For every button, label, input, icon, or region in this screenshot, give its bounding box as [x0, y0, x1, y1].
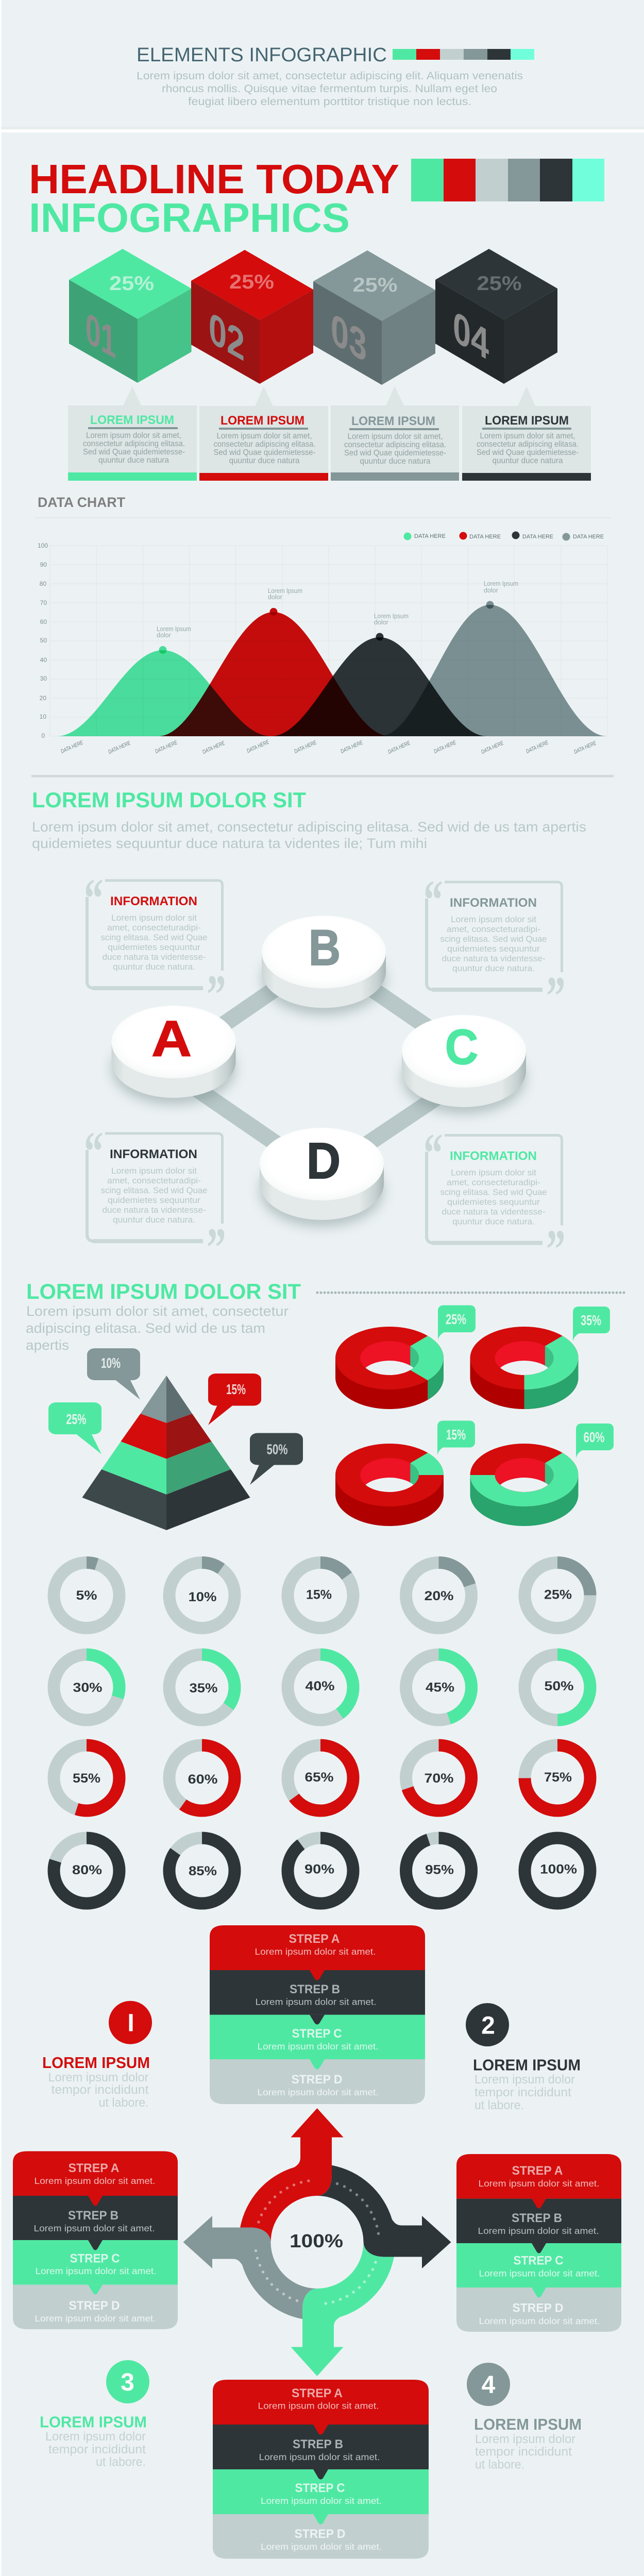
item 1	[42, 2001, 152, 2110]
section paragraph 2: apertis	[26, 1337, 69, 1353]
info card 2: Sed wid Quae quidemietesse-	[213, 448, 315, 457]
step panel: top: Lorem ipsum dolor sit amet.	[256, 1997, 376, 2007]
callout: donut 35%	[573, 1307, 610, 1342]
ring 75%	[524, 1745, 590, 1810]
item 2: Lorem ipsum dolor	[474, 2073, 575, 2087]
callout: donut 60%	[576, 1423, 614, 1459]
center label 100%: 100%	[290, 2230, 343, 2251]
step panel: bottom: STREP C	[295, 2481, 345, 2495]
ring 85%: 85%	[189, 1864, 217, 1878]
3d donut 60%	[470, 1444, 578, 1526]
arrow: down green	[291, 2242, 394, 2376]
step panel: bottom: Lorem ipsum dolor sit amet.	[259, 2452, 380, 2462]
info card 2: LOREM IPSUM	[221, 414, 304, 428]
info card 1: consectetur adipiscing elitasa.	[83, 439, 185, 448]
quote box: bottom left: “	[84, 1121, 103, 1182]
step panel: right: Lorem ipsum dolor sit amet.	[478, 2226, 599, 2236]
item 4: tempor incididunt	[475, 2445, 572, 2459]
area chart: DATA HERE	[573, 740, 598, 755]
step panel: bottom	[213, 2380, 429, 2558]
disc B: B	[309, 919, 341, 976]
callout: 25%	[48, 1402, 101, 1454]
info card 1: quuntur duce natura	[98, 456, 169, 465]
quote box: top left: amet, consecteturadipi-	[107, 923, 201, 933]
area chart: DATA HERE	[340, 739, 364, 755]
area chart: 100	[38, 542, 48, 549]
quote box: top left	[84, 868, 226, 1026]
section paragraph: quidemietes sequuntur duce natura ta videntes ile; Tum mihi	[32, 836, 427, 851]
step panel: left: STREP A	[68, 2161, 120, 2175]
info card 4: consectetur adipiscing elitasa.	[477, 440, 579, 449]
disc A: A	[151, 1010, 192, 1067]
item 3: tempor incididunt	[48, 2443, 146, 2456]
item 1: tempor incididunt	[52, 2083, 149, 2097]
step panel: bottom: STREP B	[293, 2437, 343, 2451]
quote box: top right: duce natura ta videntesse-	[442, 954, 545, 963]
data chart heading: DATA CHART	[38, 495, 125, 510]
step panel: right	[456, 2154, 621, 2332]
item 2: 2	[481, 2012, 495, 2039]
area chart: 80	[40, 580, 46, 587]
info card 4: Sed wid Quae quidemietesse-	[477, 448, 579, 457]
ring 35%	[169, 1655, 235, 1720]
cube 03: 25%	[352, 274, 398, 296]
step panel: left: Lorem ipsum dolor sit amet.	[35, 2266, 157, 2276]
quote box: bottom right	[423, 1123, 565, 1281]
info card 2	[199, 386, 328, 481]
item 1: Lorem ipsum dolor	[48, 2071, 149, 2084]
cube 02	[191, 250, 313, 384]
ring 50%	[524, 1655, 590, 1720]
ring 30%: 30%	[73, 1681, 102, 1695]
quote box: top left: quuntur duce natura.	[113, 962, 195, 972]
header intro text: feugiat libero elementum porttitor tristique non lectus.	[188, 96, 471, 108]
item 4: 4	[482, 2371, 496, 2399]
header title with palette: ELEMENTS INFOGRAPHIC	[137, 44, 387, 66]
callout: 50%	[250, 1433, 303, 1485]
info card 1	[68, 386, 197, 481]
step panel: left: Lorem ipsum dolor sit amet.	[35, 2313, 156, 2324]
area chart: DATA HERE	[433, 739, 457, 755]
area chart: DATA HERE	[525, 739, 550, 755]
arrow: right dark	[316, 2165, 451, 2268]
chart legend	[404, 532, 604, 541]
ring 80%: 80%	[72, 1863, 102, 1877]
header title with palette	[137, 44, 534, 66]
quote box: top right	[423, 870, 565, 1027]
area chart: DATA HERE	[107, 740, 132, 755]
ring 5%: 5%	[76, 1588, 97, 1603]
quote box: bottom left: amet, consecteturadipi-	[107, 1176, 201, 1185]
item 3: LOREM IPSUM	[40, 2413, 147, 2431]
quote box: bottom left: INFORMATION	[110, 1147, 197, 1161]
section paragraph 2: Lorem ipsum dolor sit amet, consectetur	[26, 1303, 289, 1319]
quote box: bottom right: ”	[546, 1219, 565, 1281]
area chart: DATA HERE	[387, 740, 412, 755]
header intro text	[137, 70, 523, 108]
section paragraph 2: adipiscing elitasa. Sed wid de us tam	[26, 1320, 265, 1336]
item 2	[466, 2003, 581, 2112]
ring 15%: 15%	[306, 1588, 332, 1602]
headline: HEADLINE TODAY	[29, 156, 399, 202]
quote box: top right: INFORMATION	[450, 896, 537, 910]
step panel: bottom: Lorem ipsum dolor sit amet.	[261, 2496, 382, 2506]
ring 75%: 75%	[544, 1770, 572, 1785]
area chart: 20	[40, 694, 46, 702]
section paragraph: Lorem ipsum dolor sit amet, consectetur adipiscing elitasa. Sed wid de us tam apertis	[32, 819, 586, 835]
step panel: left: STREP C	[70, 2251, 120, 2266]
step panel: bottom: STREP D	[295, 2527, 345, 2541]
info card 1: Lorem ipsum dolor sit amet,	[86, 431, 181, 440]
quote box: bottom left	[84, 1121, 226, 1279]
ring 20%	[406, 1563, 471, 1628]
area chart: 40	[40, 656, 47, 664]
area chart: DATA HERE	[246, 739, 270, 754]
area chart: Lorem Ipsum	[268, 587, 302, 595]
area chart: 10	[40, 713, 46, 720]
cube 02: 02	[209, 302, 245, 371]
ring 80%	[54, 1838, 120, 1903]
ring 40%	[287, 1655, 353, 1720]
quote box: top right: ”	[546, 966, 565, 1027]
ring 45%: 45%	[426, 1681, 454, 1695]
quote box: top left: “	[84, 868, 103, 929]
cube 01: 25%	[109, 273, 154, 295]
callout: donut 15%	[437, 1421, 475, 1455]
step panel: right: Lorem ipsum dolor sit amet.	[479, 2268, 600, 2278]
header intro text: rhoncus mollis. Quisque vitae fermentum turpis. Nullam eget leo	[162, 83, 497, 95]
connector lines between discs	[174, 956, 464, 1175]
ring 55%	[54, 1745, 120, 1810]
area chart: DATA HERE	[154, 739, 179, 755]
area chart: 70	[40, 599, 47, 606]
step panel: right: Lorem ipsum dolor sit amet.	[478, 2178, 600, 2189]
ring 95%: 95%	[425, 1863, 454, 1877]
info card 4	[462, 386, 591, 481]
info card 3	[331, 386, 459, 481]
callout: 10%: 10%	[101, 1355, 121, 1371]
step panel: left: Lorem ipsum dolor sit amet.	[34, 2176, 156, 2186]
header intro text: Lorem ipsum dolor sit amet, consectetur adipiscing elit. Aliquam venenatis	[137, 70, 523, 82]
quote box: bottom left: Lorem ipsum dolor sit	[111, 1166, 197, 1176]
callout: donut 60%: 60%	[583, 1429, 605, 1445]
ring 70%: 70%	[425, 1771, 453, 1786]
quote box: top left: INFORMATION	[110, 894, 197, 908]
step panel: top: Lorem ipsum dolor sit amet.	[258, 2041, 378, 2052]
palette swatches	[411, 159, 604, 201]
info card 2: consectetur adipiscing elitasa.	[213, 440, 315, 449]
cube 04: 25%	[477, 273, 521, 295]
step panel: top: Lorem ipsum dolor sit amet.	[258, 2087, 378, 2097]
step panel: right: Lorem ipsum dolor sit amet.	[479, 2316, 600, 2326]
ring 65%	[287, 1745, 353, 1810]
ring 5%	[54, 1563, 120, 1628]
quote box: bottom left: quuntur duce natura.	[113, 1215, 195, 1225]
ring 100%: 100%	[540, 1862, 577, 1876]
item 3: ut labore.	[96, 2455, 146, 2469]
section heading 2: LOREM IPSUM DOLOR SIT	[26, 1279, 301, 1303]
quote box: bottom left: duce natura ta videntesse-	[102, 1205, 206, 1215]
quote box: top left: quidemietes sequuntur	[108, 942, 200, 952]
quote box: top right: quuntur duce natura.	[452, 963, 535, 973]
step panel: top: STREP A	[289, 1932, 340, 1946]
step panel: bottom: STREP A	[292, 2386, 343, 2400]
disc C	[402, 1015, 526, 1114]
info card 4: LOREM IPSUM	[485, 414, 569, 428]
callout: donut 25%	[438, 1306, 476, 1340]
info card 4: Lorem ipsum dolor sit amet,	[480, 432, 575, 440]
cube 01: 01	[86, 303, 116, 368]
area chart: Lorem Ipsum	[157, 625, 191, 633]
step panel: top: STREP D	[292, 2073, 342, 2087]
step panel: right: STREP D	[512, 2301, 564, 2315]
step panel: right: STREP B	[512, 2211, 562, 2225]
item 4: ut labore.	[475, 2458, 524, 2472]
quote box: top left: scing elitasa. Sed wid Quae	[101, 933, 207, 942]
area chart: Lorem Ipsum	[484, 580, 518, 587]
ring 90%: 90%	[304, 1862, 334, 1876]
step panel: top: STREP B	[290, 1982, 340, 1996]
area chart	[38, 542, 607, 755]
arrow: up red	[240, 2108, 343, 2243]
quote box: bottom left: quidemietes sequuntur	[108, 1195, 200, 1205]
quote box: top right: Lorem ipsum dolor sit	[451, 914, 536, 924]
step panel: left: STREP D	[69, 2299, 120, 2313]
callout: 25%: 25%	[66, 1411, 87, 1427]
cube 03	[313, 250, 435, 385]
headline	[29, 156, 399, 241]
3d donut 35%	[470, 1327, 578, 1409]
ring 50%: 50%	[544, 1679, 574, 1693]
quote box: bottom right: quuntur duce natura.	[452, 1217, 535, 1226]
item 1: ut labore.	[99, 2096, 148, 2110]
area chart: DATA HERE	[293, 739, 318, 755]
area chart: 60	[40, 618, 47, 625]
ring 90%	[287, 1838, 353, 1903]
callout: donut 15%: 15%	[446, 1427, 466, 1443]
quote box: top right: scing elitasa. Sed wid Quae	[440, 934, 547, 944]
area chart: dolor	[374, 619, 388, 626]
ring 15%	[287, 1563, 353, 1628]
item 2: tempor incididunt	[474, 2086, 571, 2099]
pyramid chart	[82, 1376, 250, 1530]
quote box: top left: duce natura ta videntesse-	[102, 952, 206, 962]
callout: 15%: 15%	[226, 1381, 246, 1397]
quote box: top right: quidemietes sequuntur	[447, 944, 540, 954]
area chart: DATA HERE	[480, 740, 505, 755]
cube 04	[435, 249, 557, 384]
area chart: dolor	[268, 594, 282, 601]
ring 40%: 40%	[305, 1679, 335, 1693]
quote box: bottom right: duce natura ta videntesse-	[442, 1207, 545, 1217]
step panel: left: Lorem ipsum dolor sit amet.	[34, 2223, 155, 2233]
section heading: lorem ipsum dolor sit: LOREM IPSUM DOLOR SIT	[32, 788, 306, 812]
callout: donut 25%: 25%	[446, 1311, 466, 1327]
disc A	[111, 1006, 236, 1105]
ring 10%: 10%	[189, 1590, 216, 1604]
info card 3: LOREM IPSUM	[351, 414, 435, 428]
item 2: ut labore.	[474, 2098, 524, 2112]
quote box: bottom right: scing elitasa. Sed wid Quae	[440, 1187, 547, 1197]
item 4	[467, 2363, 582, 2472]
headline: INFOGRAPHICS	[29, 195, 350, 241]
area chart: 50	[40, 637, 47, 644]
quote box: top right: “	[423, 870, 443, 931]
cube 01	[69, 249, 192, 383]
quote box: top left: ”	[207, 964, 226, 1026]
info card 2: Lorem ipsum dolor sit amet,	[216, 432, 312, 440]
quote box: top right: amet, consecteturadipi-	[447, 924, 540, 934]
step panel: bottom: Lorem ipsum dolor sit amet.	[261, 2541, 382, 2552]
item 3: Lorem ipsum dolor	[45, 2430, 146, 2444]
callout: 15%	[208, 1374, 261, 1425]
info card 3: Sed wid Quae quidemietesse-	[344, 449, 446, 457]
ring 25%: 25%	[544, 1588, 572, 1602]
callout: donut 35%: 35%	[581, 1312, 601, 1328]
item 1: I	[127, 2009, 134, 2037]
step panel: left	[13, 2151, 178, 2329]
ring 55%: 55%	[73, 1771, 100, 1786]
disc B	[262, 916, 386, 1015]
ring 30%	[54, 1655, 120, 1720]
quote box: bottom right: quidemietes sequuntur	[447, 1197, 540, 1207]
disc D: D	[307, 1132, 341, 1189]
item 4: LOREM IPSUM	[474, 2415, 582, 2433]
info card 4: quuntur duce natura	[493, 456, 563, 465]
ring 70%	[406, 1745, 471, 1810]
quote box: bottom right: INFORMATION	[450, 1149, 537, 1163]
callout: 50%: 50%	[267, 1442, 288, 1457]
info card 3: quuntur duce natura	[360, 457, 431, 466]
cube 04: 04	[453, 301, 489, 370]
ring 25%	[524, 1563, 590, 1628]
area chart: Lorem Ipsum	[374, 613, 409, 620]
ring 85%	[169, 1838, 235, 1903]
disc D	[260, 1128, 384, 1227]
ring 95%	[406, 1838, 471, 1903]
ring 45%	[406, 1655, 471, 1720]
arrow: left gray	[183, 2216, 317, 2319]
chart legend: DATA HERE	[469, 534, 501, 540]
section paragraph	[32, 819, 586, 851]
item 3	[40, 2360, 149, 2469]
quote box: bottom left: ”	[207, 1217, 226, 1279]
ring 20%: 20%	[425, 1589, 453, 1603]
area chart: 30	[40, 675, 47, 682]
quote box: top left: Lorem ipsum dolor sit	[111, 913, 197, 923]
ring 35%: 35%	[190, 1681, 217, 1696]
ring 60%	[169, 1745, 235, 1810]
step panel: top: Lorem ipsum dolor sit amet.	[255, 1946, 376, 1957]
step panel: top	[210, 1925, 425, 2104]
item 1: LOREM IPSUM	[42, 2054, 150, 2072]
cube 02: 25%	[229, 271, 274, 293]
info card 1: LOREM IPSUM	[90, 413, 174, 427]
quote box: bottom right: amet, consecteturadipi-	[447, 1178, 540, 1187]
item 4: Lorem ipsum dolor	[475, 2432, 575, 2446]
item 2: LOREM IPSUM	[473, 2056, 581, 2074]
step panel: right: STREP A	[512, 2164, 563, 2178]
chart legend: DATA HERE	[522, 534, 553, 540]
area chart: 0	[41, 732, 45, 739]
ring 100%	[524, 1838, 590, 1903]
quote box: bottom left: scing elitasa. Sed wid Quae	[101, 1185, 207, 1195]
chart legend: DATA HERE	[573, 534, 604, 540]
section paragraph 2	[26, 1303, 289, 1353]
chart legend: DATA HERE	[414, 533, 446, 539]
info card 2: quuntur duce natura	[229, 456, 300, 465]
ring 60%: 60%	[188, 1772, 217, 1787]
step panel: bottom: Lorem ipsum dolor sit amet.	[258, 2401, 379, 2411]
step panel: right: STREP C	[513, 2253, 564, 2268]
area chart: DATA HERE	[60, 739, 84, 755]
area chart: dolor	[484, 587, 498, 594]
callout: 10%	[87, 1348, 140, 1400]
quote box: bottom right: Lorem ipsum dolor sit	[451, 1167, 536, 1178]
area chart: dolor	[157, 632, 171, 639]
area chart: DATA HERE	[201, 740, 226, 755]
quote box: bottom right: “	[423, 1123, 443, 1184]
3d donut 25%	[335, 1327, 444, 1409]
item 3: 3	[121, 2369, 134, 2396]
ring 10%	[169, 1563, 235, 1628]
3d donut 15%	[335, 1444, 444, 1526]
disc C: C	[445, 1020, 478, 1075]
step panel: left: STREP B	[68, 2209, 118, 2223]
step panel: top: STREP C	[292, 2027, 342, 2041]
ring 65%: 65%	[305, 1770, 334, 1785]
area chart: 90	[40, 561, 47, 568]
info card 3: consectetur adipiscing elitasa.	[344, 440, 446, 449]
info card 3: Lorem ipsum dolor sit amet,	[347, 432, 443, 441]
info card 1: Sed wid Quae quidemietesse-	[83, 448, 185, 456]
cube 03: 03	[331, 303, 367, 372]
